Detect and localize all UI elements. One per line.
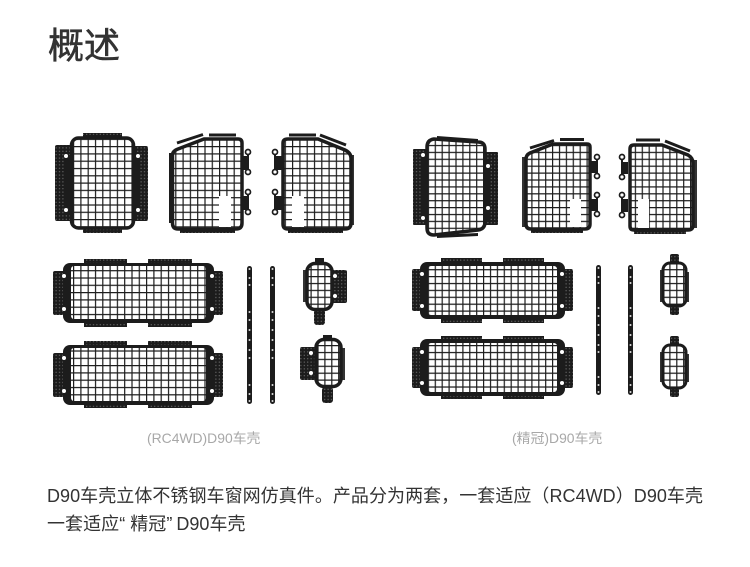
panel: small window bottom — [660, 336, 689, 397]
title: 概述 — [48, 25, 120, 66]
panel: right door window — [272, 135, 354, 233]
panel: small window top — [660, 254, 689, 315]
panel: left door window — [522, 140, 600, 233]
caption: right set: (精冠)D90车壳 — [512, 430, 602, 446]
panel: strip one — [247, 266, 252, 404]
panel: strip two — [270, 266, 275, 404]
panel: long window bottom — [412, 336, 573, 399]
panel: side window with side plates — [55, 133, 148, 233]
left set: RC4WD — [53, 133, 354, 408]
panel: side window with side plates — [413, 136, 498, 238]
panel: long window top — [412, 258, 573, 323]
panel: strip one — [596, 265, 601, 395]
panel: right door window — [620, 140, 697, 234]
description text: 一套适应“精冠”D90车壳 — [47, 514, 246, 534]
panel: left door window — [169, 134, 250, 233]
panel: long window top — [53, 259, 223, 327]
right set: Jingguan — [412, 136, 697, 399]
description text — [47, 486, 703, 534]
panel: strip two — [628, 265, 633, 395]
description text: D90车壳立体不锈钢车窗网仿真件。产品分为两套，一套适应（RC4WD）D90车壳 — [47, 486, 703, 506]
panel: small window top — [303, 258, 347, 325]
panel: small window bottom — [300, 335, 345, 403]
caption: left set: (RC4WD)D90车壳 — [147, 430, 260, 446]
panel: long window bottom — [53, 341, 223, 408]
